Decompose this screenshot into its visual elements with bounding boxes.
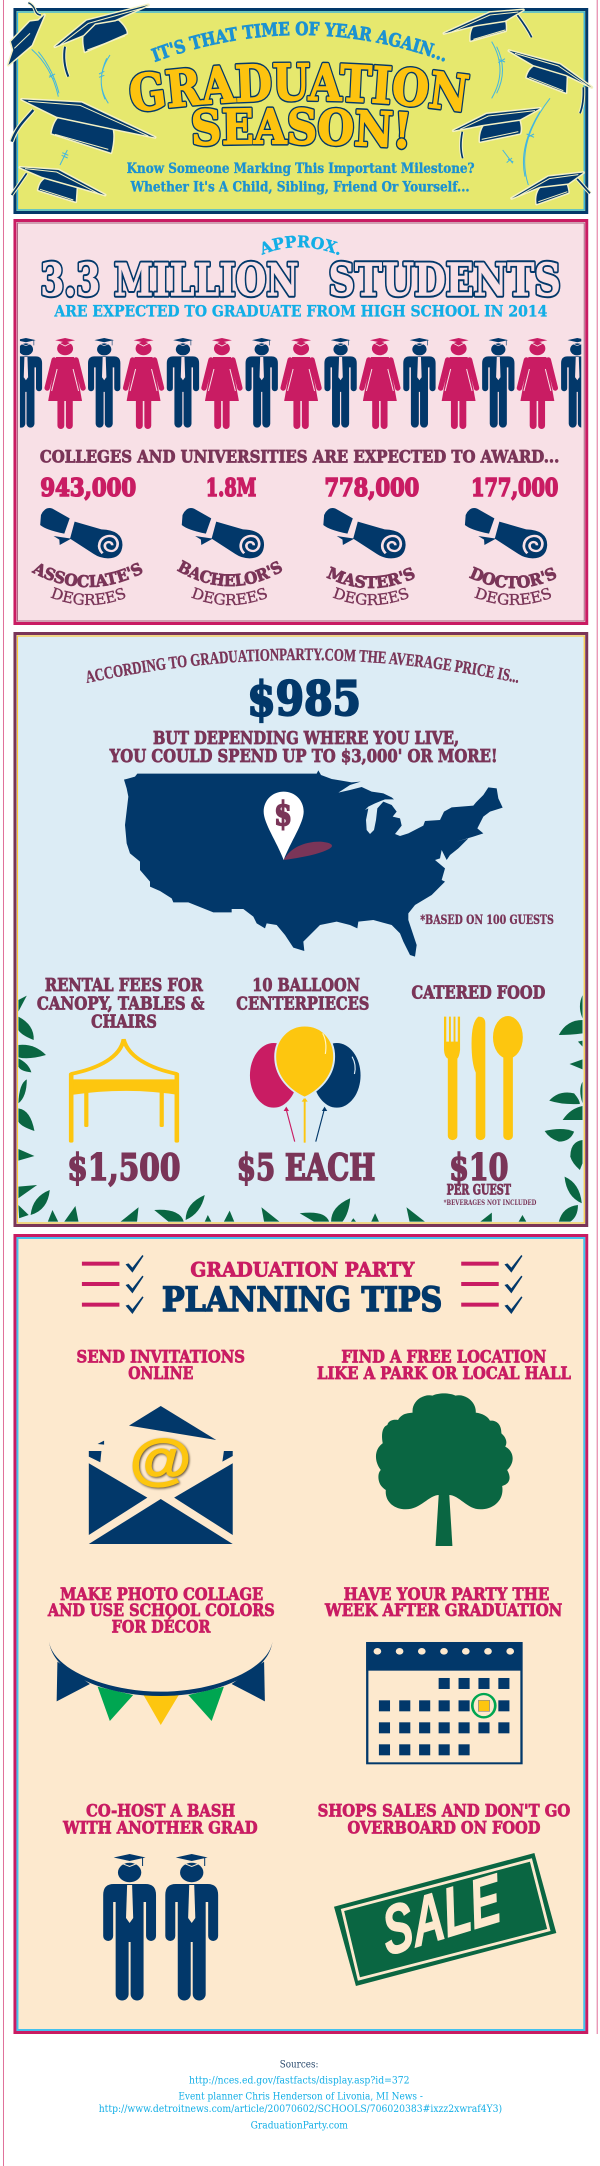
icon: at sign: @: [130, 1427, 191, 1490]
degree: associate's: DEGREES: [50, 587, 126, 606]
degree: doctor's: DOCTOR'S: [468, 566, 556, 588]
sources: Event planner Chris Henderson of Livonia, MI News -: [178, 2090, 423, 2102]
tip: collage: AND USE SCHOOL COLORS: [47, 1601, 275, 1621]
panel: party cost: [13, 632, 588, 1227]
US map with pin: [124, 770, 503, 957]
cap 7: [453, 108, 540, 158]
cap 8: [512, 173, 590, 204]
headline: 3.3 million students: MILLION: [114, 253, 299, 307]
leaves: [18, 990, 586, 1222]
headline: 3.3 million students: [40, 253, 561, 307]
tip: invitations: [77, 1348, 245, 1544]
column: rental: $1,500: [67, 1147, 180, 1189]
sources: Sources:: [280, 2058, 318, 2070]
degree: bachelor's: BACHELOR'S: [176, 560, 282, 586]
heading: PLANNING TIPS: [162, 1280, 442, 1320]
column: balloons: 10 BALLOON: [252, 976, 360, 996]
depending text: BUT DEPENDING WHERE YOU LIVE,: [153, 729, 459, 749]
icon: two graduates: [103, 1854, 218, 2000]
degree: associate's: [31, 474, 142, 606]
motion lines and caps, left side: [8, 3, 155, 202]
depending text: [109, 729, 498, 767]
title: graduation: GRADUATION: [129, 61, 471, 114]
icon: balloons: [250, 1026, 361, 1143]
based on note: *BASED ON 100 GUESTS: [420, 913, 554, 928]
column: food: $10: [449, 1147, 508, 1189]
depending text: YOU COULD SPEND UP TO $3,000' OR MORE!: [109, 747, 498, 767]
tip: week after: WEEK AFTER GRADUATION: [324, 1601, 562, 1621]
tip: week after: HAVE YOUR PARTY THE: [344, 1585, 549, 1605]
degree: doctor's: 177,000: [471, 474, 558, 502]
heading: GRADUATION PARTY: [190, 1259, 415, 1282]
cap 6: [509, 51, 592, 113]
column: food: [411, 984, 545, 1207]
pin: [264, 792, 304, 860]
icon: sale sign: [334, 1853, 556, 1986]
column: balloons: [236, 976, 375, 1189]
panel: planning tips: [13, 1234, 588, 2034]
degree: master's: 778,000: [325, 474, 419, 502]
column: balloons: $5 EACH: [237, 1147, 375, 1189]
tip: location: [317, 1348, 571, 1546]
degree: master's: MASTER'S: [326, 566, 415, 588]
column: rental: CANOPY, TABLES &: [37, 994, 205, 1014]
icon: envelope: [89, 1406, 233, 1544]
heading: it's that time of year again: IT'S THAT TIME OF YEAR AGAIN...: [150, 21, 445, 62]
icon: canopy tent: [69, 1039, 179, 1143]
motion lines and caps, right side: [444, 10, 592, 204]
column: rental: [37, 976, 205, 1189]
cap 4: [12, 167, 105, 202]
tip: location: LIKE A PARK OR LOCAL HALL: [317, 1364, 571, 1384]
subheading: [127, 161, 475, 196]
tip: invitations: SEND INVITATIONS: [77, 1348, 245, 1368]
column: food: CATERED FOOD: [411, 984, 545, 1004]
checklist icon right: [461, 1255, 522, 1314]
pin dollar sign: $: [274, 794, 292, 833]
arc heading: according to: ACCORDING TO GRADUATIONPARTY.COM THE AVERAGE PRICE IS...: [86, 648, 518, 684]
degree: bachelor's: [176, 474, 282, 606]
sources: GraduationParty.com: [251, 2119, 348, 2131]
degree: associate's: 943,000: [40, 474, 136, 502]
cap 2: [55, 5, 148, 77]
tip: invitations: ONLINE: [128, 1364, 193, 1384]
approx label: APPROX.: [262, 235, 340, 255]
degree: master's: [323, 474, 419, 606]
subheadline: ARE EXPECTED TO GRADUATE FROM HIGH SCHOOL IN 2014: [53, 301, 547, 321]
tip: co-host: CO-HOST A BASH: [86, 1802, 235, 1822]
tip: sales: OVERBOARD ON FOOD: [348, 1818, 540, 1838]
degree: bachelor's: DEGREES: [191, 587, 267, 606]
pin shadow: [284, 842, 332, 860]
icon: bunting: [49, 1642, 273, 1725]
cap 3: [12, 99, 155, 153]
column: food: PER GUEST: [447, 1182, 511, 1198]
panel: header: [6, 1, 594, 214]
cap 1: [8, 3, 44, 65]
checklist icon left: [82, 1255, 144, 1314]
sources: [99, 2058, 502, 2131]
column: balloons: CENTERPIECES: [236, 994, 369, 1014]
degree: bachelor's: 1.8M: [206, 474, 256, 502]
degree: associate's: ASSOCIATE'S: [31, 562, 142, 588]
tip: collage: [47, 1585, 275, 1725]
degree: doctor's: DEGREES: [474, 587, 552, 606]
subheading: Whether It's A Child, Sibling, Friend Or Yourself...: [130, 179, 470, 196]
icon: tree: [376, 1393, 513, 1546]
price: $985: $985: [247, 672, 361, 727]
tip: co-host: WITH ANOTHER GRAD: [62, 1818, 258, 1838]
colleges heading: COLLEGES AND UNIVERSITIES ARE EXPECTED TO AWARD...: [40, 447, 559, 467]
cap 5: [444, 10, 532, 41]
headline: 3.3 million students: 3.3: [40, 253, 100, 307]
icon: sale sign: SALE: [377, 1859, 507, 1971]
icon: calendar: [366, 1642, 522, 1763]
tip: week after: [324, 1585, 562, 1763]
tip: sales: [318, 1802, 570, 1986]
subheading: Know Someone Marking This Important Milestone?: [127, 161, 475, 177]
panel: students: [13, 219, 588, 625]
degree: doctor's: [464, 474, 558, 606]
heading: [162, 1259, 442, 1320]
tip: location: FIND A FREE LOCATION: [341, 1348, 546, 1368]
column: food: *BEVERAGES NOT INCLUDED: [444, 1198, 536, 1207]
tip: sales: SHOPS SALES AND DON'T GO: [318, 1802, 570, 1822]
sources: http://www.detroitnews.com/article/20070602/SCHOOLS/706020383#ixzz2xwraf4Y3): [99, 2103, 502, 2115]
row of graduates: [10, 338, 593, 429]
column: rental: CHAIRS: [91, 1013, 157, 1033]
icon: cutlery: [444, 1016, 523, 1140]
degree: master's: DEGREES: [332, 587, 408, 606]
tip: collage: MAKE PHOTO COLLAGE: [60, 1585, 263, 1605]
tip: collage: FOR DÉCOR: [112, 1617, 211, 1638]
tip: co-host: [62, 1802, 258, 2000]
title: season: SEASON!: [192, 106, 410, 150]
sources: http://nces.ed.gov/fastfacts/display.asp?id=372: [189, 2074, 410, 2086]
column: rental: RENTAL FEES FOR: [45, 976, 203, 996]
